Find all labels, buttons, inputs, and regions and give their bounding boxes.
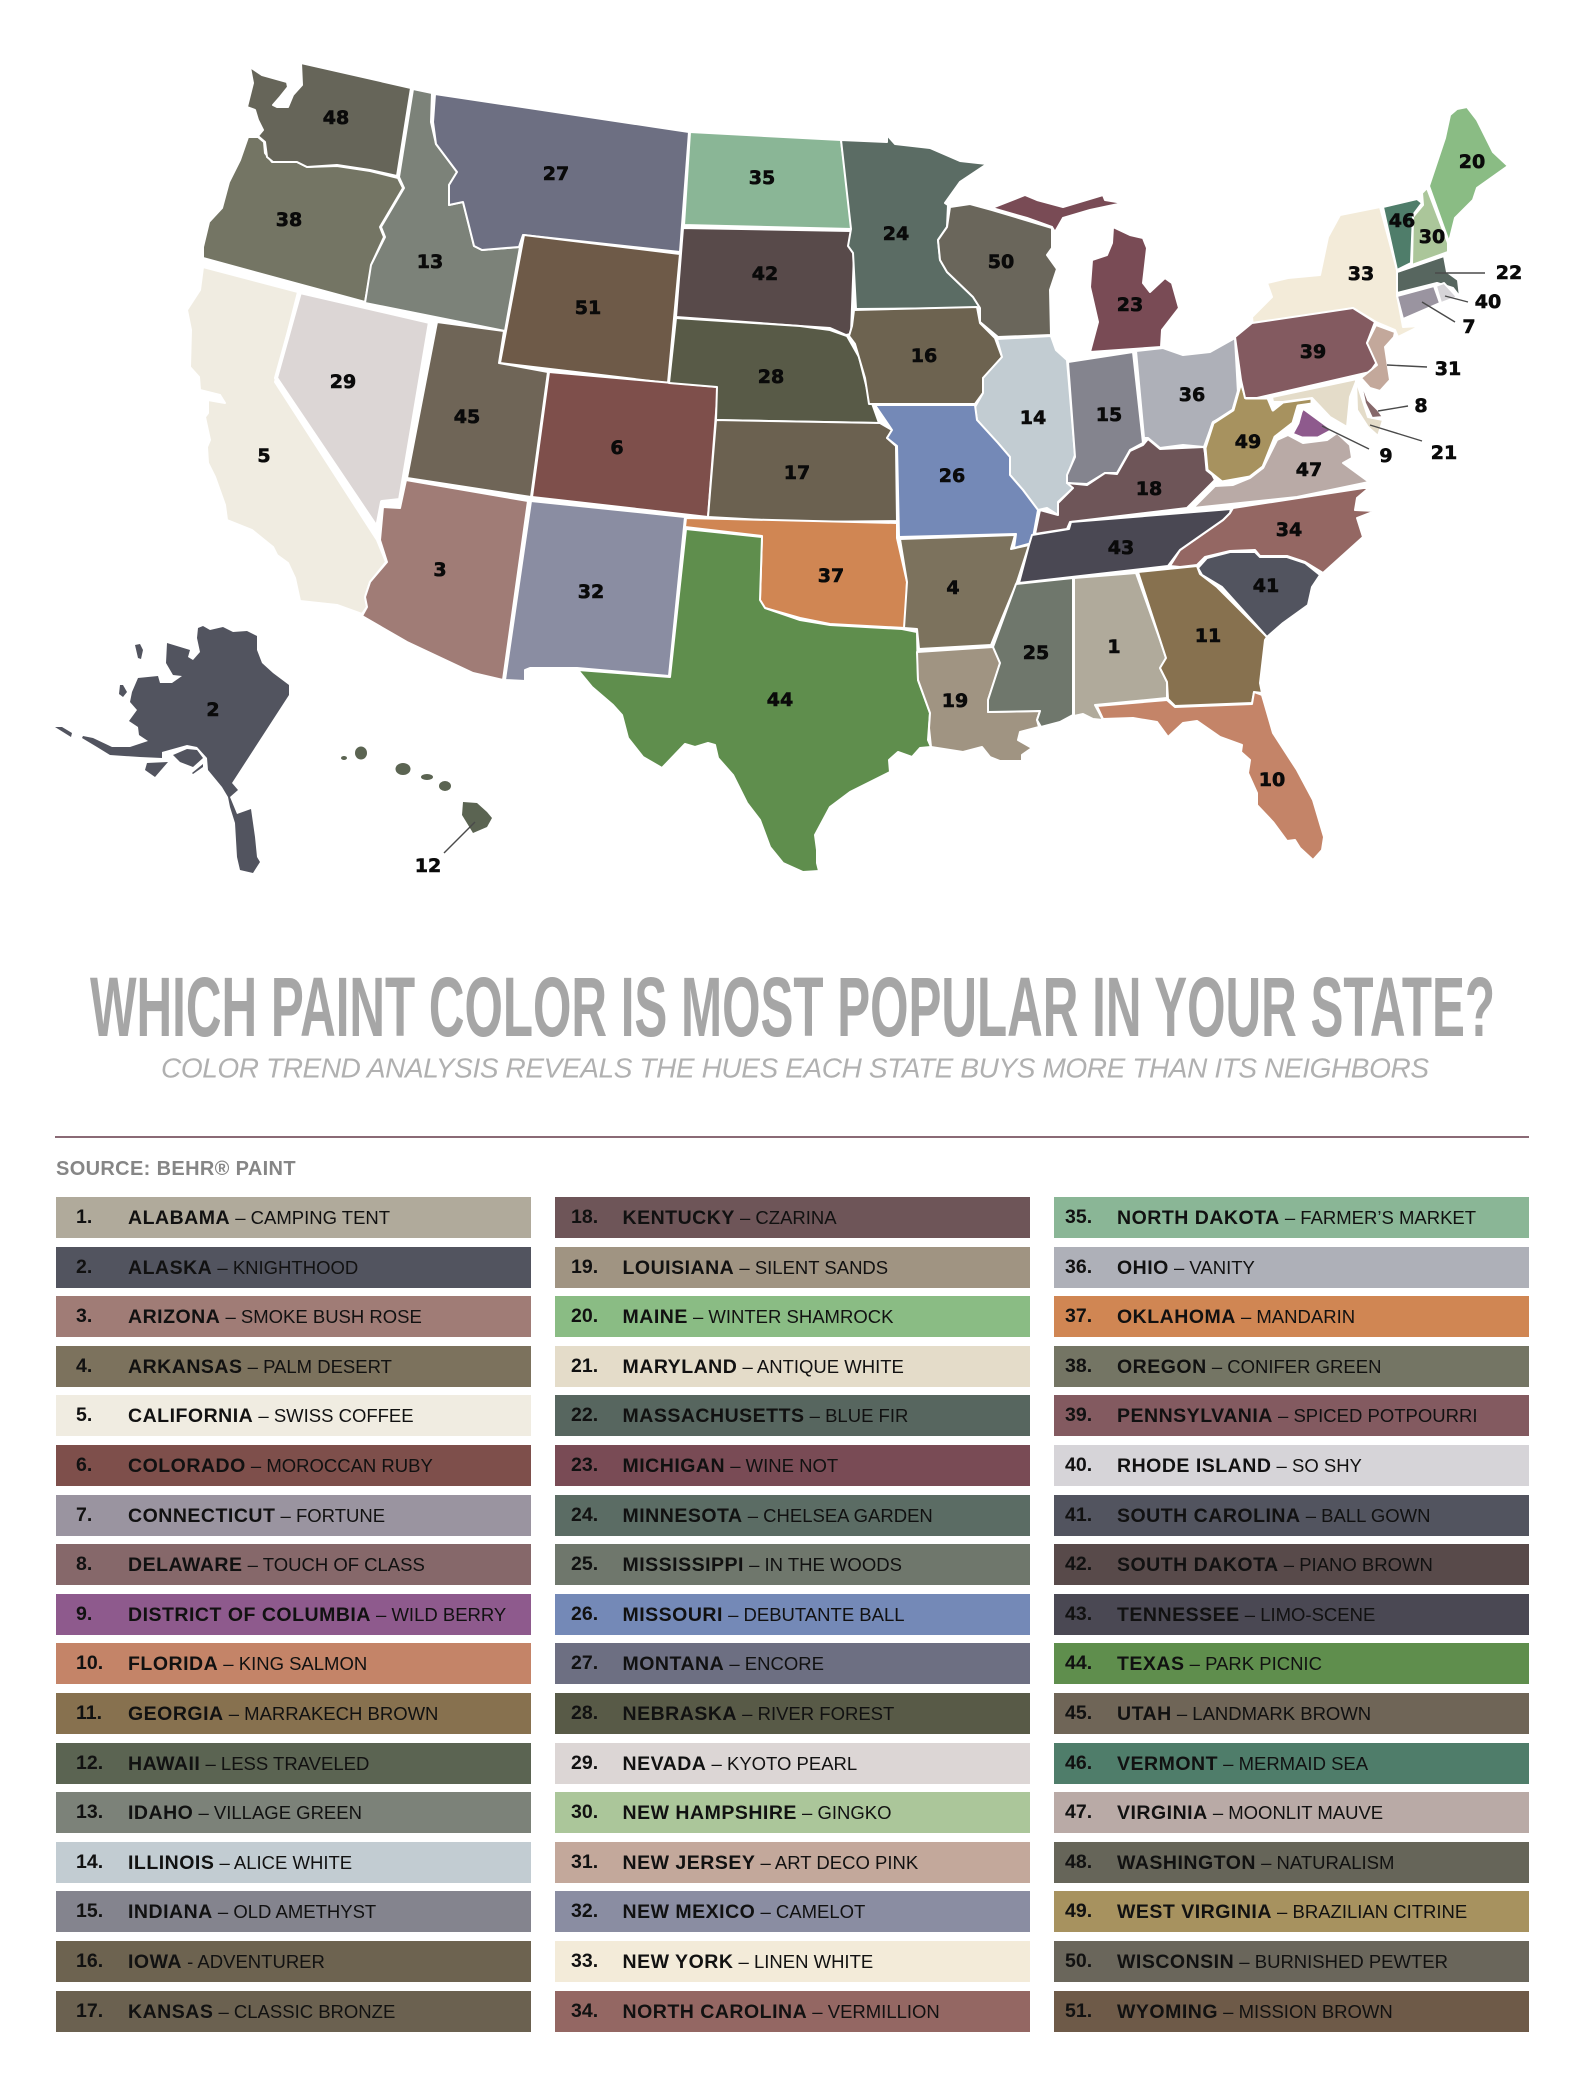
state: Wisconsin (938, 204, 1057, 337)
legend row 40 (1054, 1445, 1528, 1486)
state: New Mexico (505, 501, 685, 681)
legend row 24 (555, 1495, 1030, 1536)
legend row 24: MINNESOTA – CHELSEA GARDEN (622, 1505, 933, 1527)
legend row 28 (555, 1693, 1030, 1734)
state: Colorado (532, 372, 718, 517)
legend row 7 (56, 1495, 530, 1536)
state: Georgia (1138, 566, 1267, 706)
legend row 36: 36. (1065, 1256, 1092, 1278)
state number labels: 33 (1348, 263, 1374, 285)
legend row 29 (555, 1743, 1030, 1784)
legend row 23: 23. (571, 1454, 598, 1476)
state number labels: 36 (1179, 384, 1205, 406)
state number labels: 10 (1259, 769, 1285, 791)
state: Nevada (276, 292, 430, 528)
legend row 20 (555, 1296, 1030, 1337)
legend row 39: 39. (1065, 1404, 1092, 1426)
legend row 10: 10. (76, 1652, 103, 1674)
state number labels: 9 (1379, 445, 1393, 467)
legend row 22: 22. (571, 1404, 598, 1426)
legend row 20: MAINE – WINTER SHAMROCK (622, 1306, 893, 1328)
legend row 8 (56, 1544, 530, 1585)
legend row 19: LOUISIANA – SILENT SANDS (622, 1257, 888, 1279)
state: Wyoming (500, 235, 680, 383)
legend row 46: 46. (1065, 1752, 1092, 1774)
legend row 1: ALABAMA – CAMPING TENT (128, 1207, 390, 1229)
state: Arkansas (900, 535, 1029, 649)
legend row 48 (1054, 1842, 1528, 1883)
legend row 7: CONNECTICUT – FORTUNE (128, 1505, 385, 1527)
legend row 26: 26. (571, 1603, 598, 1625)
legend row 36 (1054, 1247, 1528, 1288)
legend row 20: 20. (571, 1305, 598, 1327)
state number labels: 7 (1462, 316, 1476, 338)
legend row 21: 21. (571, 1355, 598, 1377)
state: Vermont (1383, 199, 1422, 270)
state number labels: 16 (911, 345, 937, 367)
state number labels: 43 (1108, 537, 1134, 559)
legend row 19 (555, 1247, 1030, 1288)
state number labels: 50 (988, 251, 1014, 273)
state: Maryland (1272, 379, 1383, 436)
legend row 19: 19. (571, 1256, 598, 1278)
legend row 21 (555, 1346, 1030, 1387)
legend row 49: 49. (1065, 1900, 1092, 1922)
legend row 22: MASSACHUSETTS – BLUE FIR (622, 1405, 908, 1427)
legend row 41: 41. (1065, 1504, 1092, 1526)
legend row 51: 51. (1065, 2000, 1092, 2022)
state: Oklahoma (685, 518, 907, 628)
legend row 32 (555, 1891, 1030, 1932)
state: Delaware (1360, 379, 1383, 418)
state number labels: 4 (946, 577, 960, 599)
legend row 50 (1054, 1941, 1528, 1982)
state number labels: 20 (1459, 151, 1485, 173)
state number labels: 3 (433, 559, 447, 581)
legend row 9 (56, 1594, 530, 1635)
title and subtitle (90, 970, 1495, 1084)
subtitle: COLOR TREND ANALYSIS REVEALS THE HUES EACH STATE BUYS MORE THAN ITS NEIGHBORS (161, 1052, 1429, 1084)
state number labels: 41 (1253, 575, 1279, 597)
legend row 47: 47. (1065, 1801, 1092, 1823)
legend row 12: 12. (76, 1752, 103, 1774)
leader lines (444, 273, 1485, 853)
legend row 36: OHIO – VANITY (1117, 1257, 1255, 1279)
state: New Jersey (1361, 325, 1395, 391)
legend row 38 (1054, 1346, 1528, 1387)
state number labels: 48 (323, 107, 349, 129)
state: Massachusetts (1397, 256, 1460, 297)
legend row 43 (1054, 1594, 1528, 1635)
legend row 42: 42. (1065, 1553, 1092, 1575)
legend row 38: OREGON – CONIFER GREEN (1117, 1356, 1381, 1378)
state: Alaska (55, 626, 289, 873)
state: Kentucky (1035, 439, 1215, 534)
legend row 25 (555, 1544, 1030, 1585)
state number labels: 15 (1096, 404, 1122, 426)
legend row 37: OKLAHOMA – MANDARIN (1117, 1306, 1355, 1328)
legend row 27 (555, 1643, 1030, 1684)
legend row 45: 45. (1065, 1702, 1092, 1724)
legend row 15 (56, 1891, 530, 1932)
state number labels: 22 (1496, 262, 1522, 284)
legend row 42 (1054, 1544, 1528, 1585)
state number labels: 12 (415, 855, 441, 877)
state number labels: 23 (1117, 294, 1143, 316)
legend row 23 (555, 1445, 1030, 1486)
legend row 23: MICHIGAN – WINE NOT (622, 1455, 838, 1477)
state: Kansas (708, 420, 897, 522)
state number labels: 5 (257, 445, 271, 467)
legend row 29: 29. (571, 1752, 598, 1774)
legend row 39 (1054, 1395, 1528, 1436)
legend row 16: IOWA - ADVENTURER (128, 1951, 325, 1973)
state: Alabama (1074, 573, 1167, 720)
state number labels: 47 (1296, 459, 1322, 481)
legend row 1: 1. (76, 1206, 92, 1228)
legend row 8: DELAWARE – TOUCH OF CLASS (128, 1554, 425, 1576)
legend row 32: 32. (571, 1900, 598, 1922)
state: North Dakota (684, 132, 852, 229)
state: District of Columbia (1292, 408, 1333, 438)
legend row 16: 16. (76, 1950, 103, 1972)
legend row 6: COLORADO – MOROCCAN RUBY (128, 1455, 433, 1477)
legend row 43: TENNESSEE – LIMO-SCENE (1117, 1604, 1375, 1626)
legend row 6 (56, 1445, 530, 1486)
state: Texas (578, 529, 931, 872)
state: South Dakota (676, 228, 854, 335)
legend row 49 (1054, 1891, 1528, 1932)
legend row 13: IDAHO – VILLAGE GREEN (128, 1802, 362, 1824)
state number labels: 29 (330, 371, 356, 393)
legend row 14: ILLINOIS – ALICE WHITE (128, 1852, 352, 1874)
state number labels: 45 (454, 406, 480, 428)
legend row 11 (56, 1693, 530, 1734)
legend row 27: MONTANA – ENCORE (622, 1653, 824, 1675)
state: Utah (407, 322, 548, 497)
legend row 43: 43. (1065, 1603, 1092, 1625)
state: Illinois (975, 336, 1075, 515)
state: West Virginia (1205, 382, 1312, 482)
legend row 47 (1054, 1792, 1528, 1833)
legend row 35: NORTH DAKOTA – FARMER’S MARKET (1117, 1207, 1476, 1229)
legend row 4: ARKANSAS – PALM DESERT (128, 1356, 392, 1378)
state number labels: 17 (784, 462, 810, 484)
legend row 9: 9. (76, 1603, 92, 1625)
legend row 35 (1054, 1197, 1528, 1238)
legend row 28: NEBRASKA – RIVER FOREST (622, 1703, 894, 1725)
state number labels: 30 (1419, 226, 1445, 248)
state number labels: 2 (206, 699, 220, 721)
legend row 8: 8. (76, 1553, 92, 1575)
state: New York (1252, 207, 1420, 337)
legend row 40: 40. (1065, 1454, 1092, 1476)
legend row 32: NEW MEXICO – CAMELOT (622, 1901, 865, 1923)
state: Arizona (362, 480, 528, 680)
legend row 16 (56, 1941, 530, 1982)
state number labels: 25 (1023, 642, 1049, 664)
state: Mississippi (988, 578, 1073, 727)
legend row 49: WEST VIRGINIA – BRAZILIAN CITRINE (1117, 1901, 1467, 1923)
state number labels: 31 (1435, 358, 1461, 380)
legend row 29: NEVADA – KYOTO PEARL (622, 1753, 857, 1775)
state: Virginia (1193, 433, 1369, 508)
state number labels: 18 (1136, 478, 1162, 500)
legend row 44: TEXAS – PARK PICNIC (1117, 1653, 1322, 1675)
legend row 22 (555, 1395, 1030, 1436)
state: Oregon (203, 137, 403, 302)
legend row 25: MISSISSIPPI – IN THE WOODS (622, 1554, 902, 1576)
legend row 11: 11. (76, 1702, 102, 1724)
contiguous states (187, 63, 1508, 872)
legend row 3: 3. (76, 1305, 92, 1327)
legend row 18: 18. (571, 1206, 598, 1228)
state number labels: 13 (417, 251, 443, 273)
state: New Hampshire (1412, 188, 1448, 265)
state: Nebraska (669, 318, 879, 423)
state: California (187, 267, 386, 614)
state: North Carolina (1170, 487, 1375, 573)
map of US states (55, 64, 1522, 877)
legend row 26: MISSOURI – DEBUTANTE BALL (622, 1604, 905, 1626)
legend row 2 (56, 1247, 530, 1288)
state number labels: 26 (939, 465, 965, 487)
legend row 17: 17. (76, 2000, 103, 2022)
legend row 5: CALIFORNIA – SWISS COFFEE (128, 1405, 414, 1427)
state number labels: 35 (749, 167, 775, 189)
legend row 3 (56, 1296, 530, 1337)
state number labels: 51 (575, 297, 601, 319)
state number labels (206, 107, 1522, 877)
legend row 48: WASHINGTON – NATURALISM (1117, 1852, 1394, 1874)
state number labels: 49 (1235, 431, 1261, 453)
legend row 13: 13. (76, 1801, 103, 1823)
legend row 18: KENTUCKY – CZARINA (622, 1207, 837, 1229)
legend row 12: HAWAII – LESS TRAVELED (128, 1753, 369, 1775)
legend row 3: ARIZONA – SMOKE BUSH ROSE (128, 1306, 422, 1328)
state: Montana (433, 94, 689, 252)
state: Pennsylvania (1235, 308, 1377, 398)
state: South Carolina (1198, 552, 1320, 637)
legend row 5 (56, 1395, 530, 1436)
state: Maine (1429, 107, 1508, 242)
legend row 38: 38. (1065, 1355, 1092, 1377)
legend row 14 (56, 1842, 530, 1883)
state number labels: 34 (1276, 519, 1302, 541)
legend row 21: MARYLAND – ANTIQUE WHITE (622, 1356, 904, 1378)
state: Washington (247, 63, 411, 176)
legend row 31: NEW JERSEY – ART DECO PINK (622, 1852, 918, 1874)
state: Hawaii (341, 746, 492, 833)
legend row 17 (56, 1991, 530, 2032)
legend row 51 (1054, 1991, 1528, 2032)
state number labels: 40 (1475, 291, 1501, 313)
legend row 11: GEORGIA – MARRAKECH BROWN (128, 1703, 438, 1725)
divider line (55, 1136, 1528, 1138)
state number labels: 39 (1300, 341, 1326, 363)
legend row 33 (555, 1941, 1030, 1982)
state number labels: 11 (1195, 625, 1221, 647)
state number labels: 38 (276, 209, 302, 231)
legend row 13 (56, 1792, 530, 1833)
legend row 34: 34. (571, 2000, 598, 2022)
legend row 44: 44. (1065, 1652, 1092, 1674)
legend row 31 (555, 1842, 1030, 1883)
state number labels: 19 (942, 690, 968, 712)
state: Louisiana (917, 647, 1040, 761)
state number labels: 14 (1020, 407, 1046, 429)
legend row 37: 37. (1065, 1305, 1092, 1327)
state: Tennessee (1019, 509, 1231, 583)
legend row 4: 4. (76, 1355, 92, 1377)
legend row 25: 25. (571, 1553, 598, 1575)
legend row 48: 48. (1065, 1851, 1092, 1873)
legend row 30: 30. (571, 1801, 598, 1823)
legend row 15: 15. (76, 1900, 103, 1922)
legend row 46: VERMONT – MERMAID SEA (1117, 1753, 1368, 1775)
state: Ohio (1136, 338, 1238, 448)
legend row 30 (555, 1792, 1030, 1833)
state: Missouri (875, 405, 1038, 548)
legend row 26 (555, 1594, 1030, 1635)
legend row 10 (56, 1643, 530, 1684)
legend row 45 (1054, 1693, 1528, 1734)
legend row 44 (1054, 1643, 1528, 1684)
state number labels: 42 (752, 263, 778, 285)
state: Indiana (1067, 352, 1143, 484)
legend row 2: 2. (76, 1256, 92, 1278)
state: Florida (1097, 692, 1324, 860)
legend row 24: 24. (571, 1504, 598, 1526)
state number labels: 6 (610, 437, 624, 459)
legend row 37 (1054, 1296, 1528, 1337)
legend row 34 (555, 1991, 1030, 2032)
legend row 33: NEW YORK – LINEN WHITE (622, 1951, 873, 1973)
legend row 10: FLORIDA – KING SALMON (128, 1653, 367, 1675)
legend row 34: NORTH CAROLINA – VERMILLION (622, 2001, 940, 2023)
legend row 12 (56, 1743, 530, 1784)
legend row 31: 31. (571, 1851, 598, 1873)
legend row 2: ALASKA – KNIGHTHOOD (128, 1257, 358, 1279)
state number labels: 44 (767, 689, 793, 711)
legend row 40: RHODE ISLAND – SO SHY (1117, 1455, 1362, 1477)
legend row 6: 6. (76, 1454, 92, 1476)
legend row 17: KANSAS – CLASSIC BRONZE (128, 2001, 395, 2023)
state: Minnesota (841, 135, 987, 309)
state: Connecticut (1397, 286, 1440, 319)
legend row 42: SOUTH DAKOTA – PIANO BROWN (1117, 1554, 1433, 1576)
legend row 51: WYOMING – MISSION BROWN (1117, 2001, 1393, 2023)
legend row 41: SOUTH CAROLINA – BALL GOWN (1117, 1505, 1430, 1527)
state number labels: 28 (758, 366, 784, 388)
state: Rhode Island (1436, 283, 1457, 303)
legend row 4 (56, 1346, 530, 1387)
legend row 1 (56, 1197, 530, 1238)
legend row 47: VIRGINIA – MOONLIT MAUVE (1117, 1802, 1383, 1824)
state number labels: 46 (1389, 210, 1415, 232)
state: Idaho (365, 89, 520, 331)
state number labels: 32 (578, 581, 604, 603)
legend row 45: UTAH – LANDMARK BROWN (1117, 1703, 1371, 1725)
legend row 28: 28. (571, 1702, 598, 1724)
state number labels: 27 (543, 163, 569, 185)
state number labels: 24 (883, 223, 909, 245)
source note: SOURCE: BEHR® PAINT (56, 1158, 296, 1180)
legend row 14: 14. (76, 1851, 103, 1873)
legend row 33: 33. (571, 1950, 598, 1972)
legend row 35: 35. (1065, 1206, 1092, 1228)
legend row 41 (1054, 1495, 1528, 1536)
state: Iowa (849, 307, 1002, 404)
legend row 15: INDIANA – OLD AMETHYST (128, 1901, 376, 1923)
legend row 5: 5. (76, 1404, 92, 1426)
state number labels: 21 (1431, 442, 1457, 464)
legend row 39: PENNSYLVANIA – SPICED POTPOURRI (1117, 1405, 1477, 1427)
legend row 7: 7. (76, 1504, 92, 1526)
state number labels: 37 (818, 565, 844, 587)
legend row 46 (1054, 1743, 1528, 1784)
state number labels: 8 (1414, 395, 1428, 417)
legend row 18 (555, 1197, 1030, 1238)
state: Michigan (992, 195, 1179, 352)
legend row 50: WISCONSIN – BURNISHED PEWTER (1117, 1951, 1448, 1973)
legend row 30: NEW HAMPSHIRE – GINGKO (622, 1802, 892, 1824)
state number labels: 1 (1107, 636, 1121, 658)
legend row 9: DISTRICT OF COLUMBIA – WILD BERRY (128, 1604, 506, 1626)
legend row 27: 27. (571, 1652, 598, 1674)
legend row 50: 50. (1065, 1950, 1092, 1972)
